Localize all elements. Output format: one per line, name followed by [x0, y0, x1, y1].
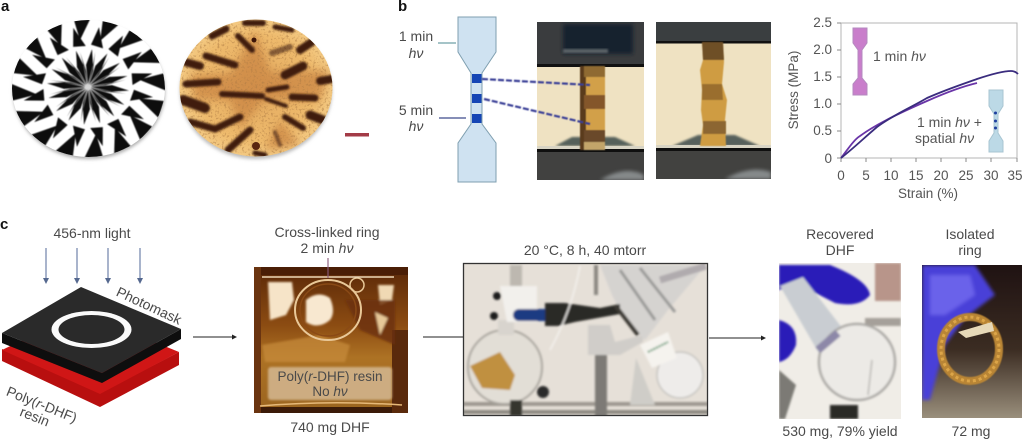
patterned resin disk [179, 19, 333, 159]
isolated ring label [945, 226, 995, 258]
amber ring [941, 317, 999, 381]
top adapter [500, 286, 537, 322]
x-axis tick labels: 10 [883, 168, 899, 183]
label: 1 min hv: 1 min [399, 28, 433, 44]
y-axis tick labels: 0.5 [813, 123, 832, 138]
mini dogbone purple [853, 28, 867, 95]
curve: 1 min hv [841, 83, 977, 158]
dogbone specimen diagram [458, 17, 496, 182]
light label: 456-nm light [53, 225, 131, 241]
x-axis tick labels: 25 [958, 168, 974, 183]
axis ticks [837, 23, 1017, 162]
curve: 1 min hv + spatial hv [841, 71, 1018, 158]
cross-linked ring label [274, 224, 380, 256]
label 1 min hv + spatial hv: 1 min hν + [917, 114, 982, 130]
photomask plate [2, 287, 181, 383]
x-axis tick labels: 30 [983, 168, 999, 183]
isolated ring label: Isolated [945, 226, 995, 242]
photomask disk [10, 15, 166, 159]
x-axis tick labels: 15 [908, 168, 924, 183]
5-min hv exposed band [472, 74, 482, 83]
label: 5 min hv: hν [409, 118, 423, 134]
y-axis title: Stress (MPa) [786, 51, 801, 129]
middle exposed band [472, 94, 482, 103]
x-axis title: Strain (%) [898, 186, 958, 201]
dashed connector lines [482, 79, 590, 124]
scale bar [345, 133, 369, 136]
y-axis tick labels: 2.5 [813, 15, 832, 30]
recovered DHF label: DHF [826, 242, 854, 258]
label: 5 min hv: 5 min [399, 102, 433, 118]
apparatus frame [464, 264, 708, 416]
x-axis tick labels: 0 [837, 168, 845, 183]
glass flask [819, 324, 895, 400]
isolated ring label: ring [958, 242, 982, 258]
label: 1 min hv: hν [409, 45, 423, 61]
ring pointer [327, 258, 329, 278]
label: 5 min hv [399, 102, 466, 134]
label 1 min hv + spatial hv [915, 114, 982, 146]
y-axis tick labels: 0 [824, 151, 832, 166]
isolated mass label: 72 mg [952, 423, 990, 439]
photo: distillation apparatus [463, 263, 708, 416]
stopcock knobs [493, 292, 501, 300]
y-axis tick labels [813, 15, 832, 166]
resin label: resin [18, 403, 52, 429]
photo: tensile specimen after strain [656, 22, 771, 179]
photomask label: Photomask [114, 283, 185, 328]
x-axis tick labels [837, 168, 1023, 183]
x-axis tick labels: 20 [933, 168, 949, 183]
x-axis tick labels: 35 [1007, 168, 1023, 183]
mini dogbone blue with dots [989, 90, 1003, 152]
glass neck [780, 277, 846, 355]
sample column [585, 76, 606, 131]
photo: resin in mould [254, 267, 408, 413]
condenser glass [600, 265, 706, 340]
recovered DHF label: Recovered [806, 226, 874, 242]
lower exposed band [472, 114, 482, 123]
recovered DHF label [806, 226, 874, 258]
label 1 min hv: 1 min hν [873, 48, 926, 64]
conditions label: 20 °C, 8 h, 40 mtorr [524, 242, 646, 258]
cross-linked ring label: Cross-linked ring [274, 224, 380, 240]
blue handle [513, 309, 550, 321]
mass label: 740 mg DHF [290, 419, 370, 435]
photo: recovered DHF flask [779, 263, 901, 419]
label: 1 min hv [399, 28, 456, 61]
cross-linked ring label: 2 min hν [301, 240, 353, 256]
recovered mass label: 530 mg, 79% yield [782, 423, 898, 439]
y-axis tick labels: 1.5 [813, 69, 832, 84]
y-axis tick labels: 2.0 [813, 42, 832, 57]
x-axis tick labels: 5 [862, 168, 870, 183]
red resin layer [2, 312, 179, 407]
support rod [595, 352, 607, 416]
resin label: Poly(r-DHF) [4, 383, 79, 426]
stress-strain chart [786, 15, 1023, 201]
stretched sample column [700, 42, 727, 146]
panel c label: c [0, 216, 8, 233]
left flask [468, 330, 542, 404]
photo: tensile specimen before strain [537, 22, 644, 180]
resin label box: No hν [312, 384, 348, 399]
photo: isolated ring [922, 265, 1022, 418]
resin label box: Poly(r-DHF) resin [277, 369, 383, 384]
arrow to recovered DHF [709, 336, 766, 340]
line to distillation photo [423, 336, 463, 338]
plot frame [841, 23, 1017, 158]
receiving flask [657, 352, 703, 398]
glove [922, 265, 995, 400]
y-axis tick labels: 1.0 [813, 96, 832, 111]
arrow to resin photo [193, 334, 237, 340]
ring aperture [52, 311, 132, 348]
gloved fingers [779, 265, 870, 304]
label 1 min hv + spatial hv: spatial hν [915, 130, 974, 146]
light arrows [43, 248, 143, 284]
resin label box [268, 367, 392, 400]
